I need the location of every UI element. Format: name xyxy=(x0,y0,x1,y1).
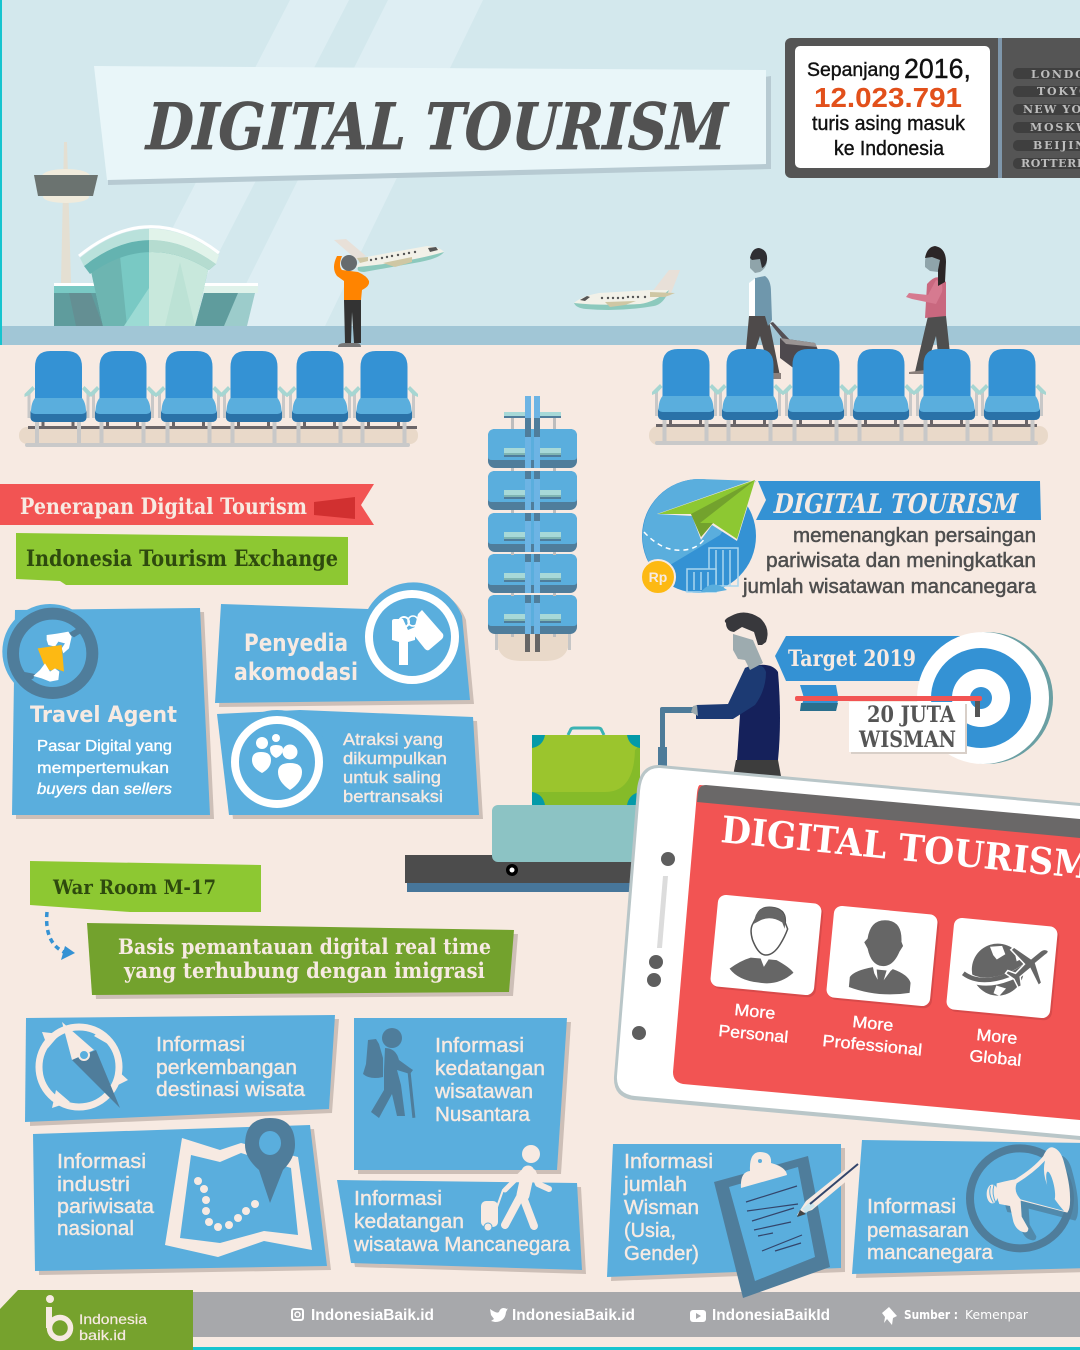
icon: people group xyxy=(235,720,319,804)
panel: pemasaran mancanegara xyxy=(852,1140,1080,1278)
digital tourism description: memenangkan persaingan xyxy=(793,525,1036,547)
icon: traveller with trolley xyxy=(481,1145,549,1231)
panel: travel agent: Pasar Digital yang xyxy=(37,738,172,755)
basis pemantauan callout: yang terhubung dengan imigrasi xyxy=(123,958,485,983)
smartphone mockup xyxy=(614,765,1080,1140)
tile: more professional xyxy=(822,905,940,1060)
digital tourism description: pariwisata dan meningkatkan xyxy=(766,550,1036,572)
panel: perkembangan destinasi: destinasi wisata xyxy=(156,1079,306,1101)
panel: wisatawan mancanegara: Informasi xyxy=(354,1188,442,1210)
panel: wisatawan nusantara: wisatawan xyxy=(434,1081,533,1103)
panel: travel agent: Travel Agent xyxy=(30,703,177,728)
target 2019 with dartboard: 20 JUTA xyxy=(867,702,956,728)
panel: travel agent: mempertemukan xyxy=(37,760,169,777)
panel: perkembangan destinasi: Informasi xyxy=(156,1034,245,1056)
person with orange shirt xyxy=(334,255,369,347)
red heading banner xyxy=(0,484,374,525)
panel: penyedia akomodasi: Penyedia xyxy=(244,629,348,657)
icon: pushpin xyxy=(882,1307,897,1325)
digital tourism description: jumlah wisatawan mancanegara xyxy=(742,576,1037,598)
panel: penyedia akomodasi: akomodasi xyxy=(234,658,358,686)
panel: atraksi xyxy=(217,710,483,819)
icon: compass xyxy=(39,1022,128,1108)
departure board xyxy=(785,38,1080,178)
panel: travel agent: buyers dan sellers xyxy=(37,781,172,798)
target 2019 with dartboard: WISMAN xyxy=(858,727,956,753)
tile: more personal: Personal xyxy=(718,1022,789,1047)
board statistic card: 2016, xyxy=(904,53,971,84)
panel: atraksi: Atraksi yang xyxy=(343,730,443,749)
icon: hiker xyxy=(363,1028,415,1118)
panel: pemasaran mancanegara: mancanegara xyxy=(867,1242,994,1264)
paper plane xyxy=(657,479,756,541)
sky background xyxy=(0,0,1080,326)
light beams xyxy=(122,0,483,326)
plane flying left xyxy=(574,270,680,310)
panel: wisatawan nusantara xyxy=(354,1018,571,1174)
right seat row xyxy=(649,349,1048,445)
arrow: dashed curve xyxy=(47,912,75,960)
footer bar: IndonesiaBaikId xyxy=(712,1307,830,1324)
panel: industri pariwisata: nasional xyxy=(57,1218,134,1240)
panel: pemasaran mancanegara: Informasi xyxy=(867,1196,956,1218)
panel: jumlah wisman: jumlah xyxy=(623,1174,687,1196)
footer bar: Kemenpar xyxy=(965,1308,1028,1322)
man walking with suitcase xyxy=(745,248,818,379)
plane flying right xyxy=(334,239,444,272)
panel: industri pariwisata: Informasi xyxy=(57,1151,146,1173)
logo block: baik.id xyxy=(79,1327,126,1343)
title text: DIGITAL TOURISM xyxy=(139,90,735,165)
panel: jumlah wisman: Gender) xyxy=(624,1243,699,1265)
panel: industri pariwisata: industri xyxy=(57,1174,130,1196)
tile: more professional: More xyxy=(852,1013,894,1035)
panel: jumlah wisman xyxy=(607,1144,868,1298)
green heading: Indonesia Tourism Exchange: Indonesia Tourism Exchange xyxy=(26,546,338,572)
panel: jumlah wisman: Wisman xyxy=(624,1197,699,1219)
ground band xyxy=(0,326,1080,345)
panel: industri pariwisata xyxy=(33,1118,331,1275)
tile: more global xyxy=(946,917,1060,1070)
board statistic card: turis asing masuk xyxy=(812,113,966,135)
woman walking xyxy=(906,246,952,374)
tile: more professional: Professional xyxy=(822,1032,923,1060)
board statistic card: Sepanjang xyxy=(807,60,900,81)
logo block: Indonesia xyxy=(79,1311,147,1327)
airport tower xyxy=(34,142,98,283)
panel: jumlah wisman: (Usia, xyxy=(624,1220,676,1242)
red heading banner: Penerapan Digital Tourism xyxy=(20,494,307,520)
board statistic card: ke Indonesia xyxy=(834,138,945,160)
tile: more global: More xyxy=(976,1026,1018,1048)
icon: youtube xyxy=(690,1310,706,1322)
green heading: war room xyxy=(30,861,261,912)
title banner xyxy=(94,66,771,185)
panel: travel agent xyxy=(2,604,214,819)
panel: industri pariwisata: pariwisata xyxy=(57,1196,155,1218)
baggage conveyor with green suitcase xyxy=(405,728,652,892)
logo block xyxy=(0,1290,193,1350)
airport terminal xyxy=(54,227,258,326)
digital tourism banner: DIGITAL TOURISM xyxy=(771,488,1021,520)
board statistic card: 12.023.791 xyxy=(814,82,962,113)
basis pemantauan callout xyxy=(87,923,518,999)
icon: key and tag xyxy=(369,594,455,680)
icon: map with pin xyxy=(165,1118,312,1257)
board statistic card xyxy=(795,46,990,168)
panel: wisatawan mancanegara: kedatangan xyxy=(354,1211,464,1233)
panel: atraksi: untuk saling xyxy=(343,768,441,787)
footer bar: IndonesiaBaik.id xyxy=(512,1307,635,1324)
green heading: war room: War Room M-17 xyxy=(52,875,216,899)
icon: globe with paper plane xyxy=(641,479,756,594)
panel: wisatawan nusantara: Nusantara xyxy=(435,1104,531,1126)
panel: wisatawan mancanegara xyxy=(337,1145,586,1274)
panel: jumlah wisman: Informasi xyxy=(624,1151,713,1173)
panel: penyedia akomodasi xyxy=(215,582,474,707)
footer bar: IndonesiaBaik.id xyxy=(311,1307,434,1324)
icon: megaphone xyxy=(970,1147,1078,1248)
man at baggage handle xyxy=(658,612,781,790)
panel: wisatawan nusantara: kedatangan xyxy=(435,1058,545,1080)
green heading: Indonesia Tourism Exchange xyxy=(16,533,348,585)
tile: more personal: More xyxy=(734,1001,776,1023)
panel: pemasaran mancanegara: pemasaran xyxy=(867,1220,969,1242)
left seat row xyxy=(19,351,418,447)
icon: twitter xyxy=(490,1308,508,1322)
target 2019 with dartboard: Target 2019 xyxy=(788,646,916,672)
tile: more global: Global xyxy=(969,1047,1022,1070)
city list xyxy=(1013,68,1080,170)
basis pemantauan callout: Basis pemantauan digital real time xyxy=(118,934,491,959)
digital tourism description xyxy=(742,525,1037,598)
screen xyxy=(673,785,1080,1120)
icon: clipboard and pen xyxy=(714,1152,868,1298)
icon: instagram xyxy=(292,1309,303,1320)
left teal edge xyxy=(0,0,2,345)
target 2019 with dartboard xyxy=(775,632,1053,764)
panel: atraksi: dikumpulkan xyxy=(343,749,447,768)
panel: wisatawan mancanegara: wisatawa Mancanegara xyxy=(353,1234,571,1256)
panel: atraksi: bertransaksi xyxy=(343,787,443,806)
panel: perkembangan destinasi: perkembangan xyxy=(156,1057,297,1079)
footer bar xyxy=(193,1292,1080,1350)
footer bar: Sumber : xyxy=(904,1308,958,1322)
panel: wisatawan nusantara: Informasi xyxy=(435,1035,524,1057)
tile: more personal xyxy=(710,894,824,1047)
icon: globe with paper plane: Rp xyxy=(649,569,667,585)
top view seat column xyxy=(488,396,577,661)
panel: perkembangan destinasi xyxy=(25,1015,339,1126)
icon: exchange hands xyxy=(2,604,98,699)
